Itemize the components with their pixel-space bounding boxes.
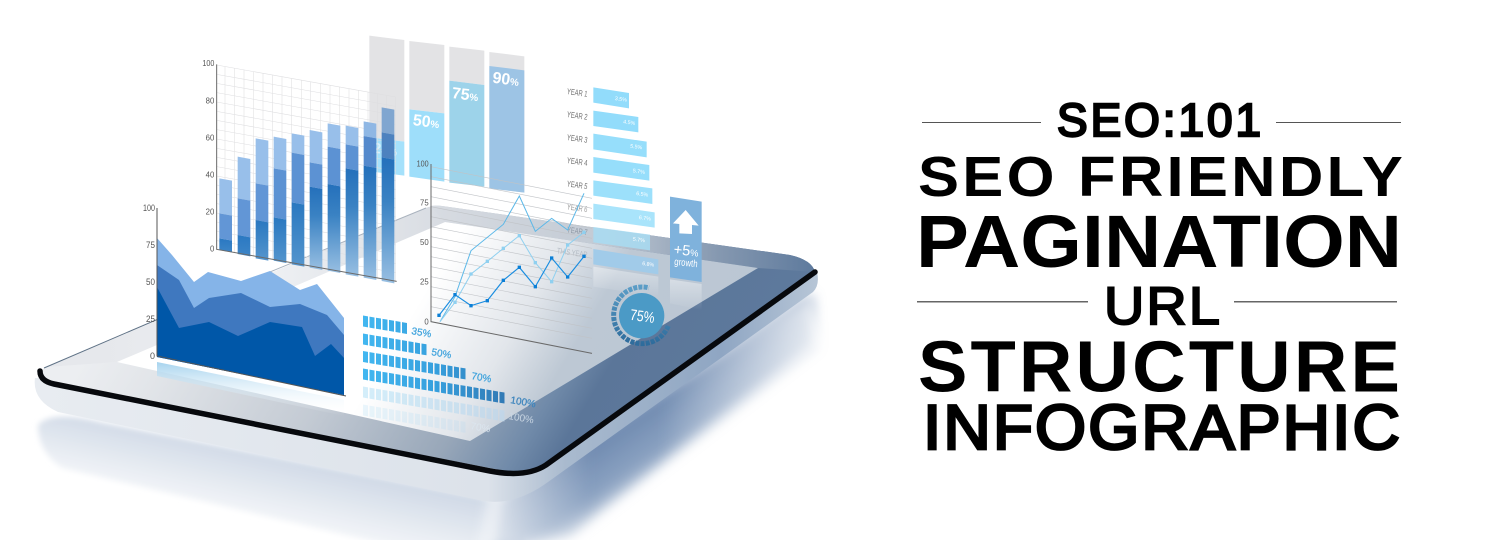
column 50 percent: 50% xyxy=(412,112,440,132)
axis labels: 40 xyxy=(206,169,214,179)
column 90 percent xyxy=(489,52,524,193)
column 25 percent: 25% xyxy=(372,141,399,160)
axis labels: 100 xyxy=(202,58,214,68)
area axis labels: 50 xyxy=(146,277,155,287)
heading: SEO:101: SEO:101 xyxy=(1057,94,1264,146)
year labels: YEAR 5 xyxy=(566,178,588,191)
bar labels: 100% xyxy=(507,411,535,426)
tablet reflection xyxy=(38,295,830,540)
title block xyxy=(916,94,1406,463)
line chart labels xyxy=(417,158,429,326)
bars xyxy=(219,107,394,283)
axis labels: 60 xyxy=(206,132,214,142)
year labels: YEAR 4 xyxy=(566,155,588,168)
line chart axes xyxy=(431,164,592,353)
year bar values: 3.5% xyxy=(614,96,627,104)
heading: PAGINATION: PAGINATION xyxy=(916,200,1402,283)
bar row 100 percent xyxy=(363,374,506,398)
percent columns xyxy=(369,36,524,193)
series three line xyxy=(437,255,586,317)
icon: growth arrow xyxy=(673,210,699,234)
area reflection xyxy=(157,362,344,416)
bar row 50 percent xyxy=(363,339,428,350)
year bar values: 6.8% xyxy=(642,261,655,269)
tablet upper left band xyxy=(46,206,445,367)
growth panel: +5% xyxy=(673,242,699,261)
axis labels: 0 xyxy=(210,243,214,253)
bar reflection row one xyxy=(363,392,506,416)
chart axes xyxy=(217,64,397,281)
bar labels: 70% xyxy=(470,371,492,385)
line chart labels: 75 xyxy=(420,197,429,207)
heading: URL: URL xyxy=(1104,277,1222,336)
growth panel xyxy=(670,197,702,310)
year bar values: 4.5% xyxy=(623,119,636,127)
bar row 70 percent xyxy=(363,356,467,374)
bar labels: 35% xyxy=(410,326,432,340)
series two line xyxy=(440,231,586,322)
line chart labels: 25 xyxy=(420,277,429,287)
year bar values: 5.5% xyxy=(630,144,643,151)
line chart labels: 0 xyxy=(424,316,429,326)
stacked bar chart xyxy=(202,58,397,283)
area axis labels: 0 xyxy=(150,351,155,361)
year labels xyxy=(556,86,588,260)
heading: STRUCTURE: STRUCTURE xyxy=(918,328,1403,408)
tablet top edge highlight xyxy=(226,208,426,290)
rule right top xyxy=(1276,122,1401,123)
gauge 75 percent: 75% xyxy=(629,307,656,327)
area axis labels xyxy=(143,203,155,361)
axis labels: 80 xyxy=(206,95,214,105)
heading: INFOGRAPHIC: INFOGRAPHIC xyxy=(923,393,1402,463)
column 75 percent: 75% xyxy=(451,85,479,105)
light area xyxy=(157,238,344,395)
year bar values: 6.5% xyxy=(636,191,649,199)
year bar values: 6.7% xyxy=(638,215,651,223)
year labels: YEAR 2 xyxy=(566,109,588,122)
tablet bezel xyxy=(40,206,815,473)
line chart grid xyxy=(431,167,592,338)
tablet xyxy=(35,206,830,540)
line chart labels: 100 xyxy=(417,158,429,168)
rule left top xyxy=(922,122,1041,123)
tablet upper right band xyxy=(430,206,815,272)
line chart labels: 50 xyxy=(420,237,429,247)
year bar values: 5.7% xyxy=(632,237,645,244)
chart grid xyxy=(217,65,396,282)
column 90 percent: 90% xyxy=(492,70,520,90)
year bars xyxy=(593,87,658,297)
bar row 35 percent xyxy=(363,321,408,329)
progress bars xyxy=(363,321,537,435)
tablet black edge xyxy=(40,272,815,473)
year labels: YEAR 6 xyxy=(566,201,588,214)
rule left middle xyxy=(917,301,1088,302)
bar labels: 70% xyxy=(469,421,491,435)
area axis labels: 75 xyxy=(146,240,155,250)
area axes xyxy=(157,208,346,396)
area axis labels: 25 xyxy=(146,314,155,324)
year labels: THIS YEAR xyxy=(556,245,588,260)
heading: SEO FRIENDLY: SEO FRIENDLY xyxy=(918,145,1406,209)
line chart xyxy=(417,158,592,353)
axis labels: 20 xyxy=(206,206,214,216)
area axis labels: 100 xyxy=(143,203,155,213)
growth panel: growth xyxy=(674,257,698,270)
mid area xyxy=(157,265,344,395)
column 25 percent xyxy=(369,36,404,176)
tablet body xyxy=(35,272,818,502)
year bars and line chart group xyxy=(417,86,702,353)
year labels: YEAR 7 xyxy=(566,224,588,237)
rule right middle xyxy=(1234,301,1397,302)
year labels: YEAR 1 xyxy=(566,86,588,99)
area chart xyxy=(143,203,346,416)
bar reflection row two xyxy=(363,410,467,428)
bar labels: 100% xyxy=(509,395,537,410)
dark area xyxy=(157,287,344,395)
bar labels: 50% xyxy=(430,347,452,361)
axis labels xyxy=(202,58,214,253)
gauge 75 percent xyxy=(614,287,668,344)
series one line xyxy=(440,193,584,322)
tablet screen xyxy=(117,222,758,441)
column 75 percent xyxy=(449,47,484,187)
bar labels xyxy=(410,326,537,435)
year labels: YEAR 3 xyxy=(566,132,588,145)
column 50 percent xyxy=(409,41,444,182)
year bar values xyxy=(614,96,655,269)
tablet top left edge xyxy=(44,290,226,368)
year bar values: 5.7% xyxy=(632,168,645,176)
